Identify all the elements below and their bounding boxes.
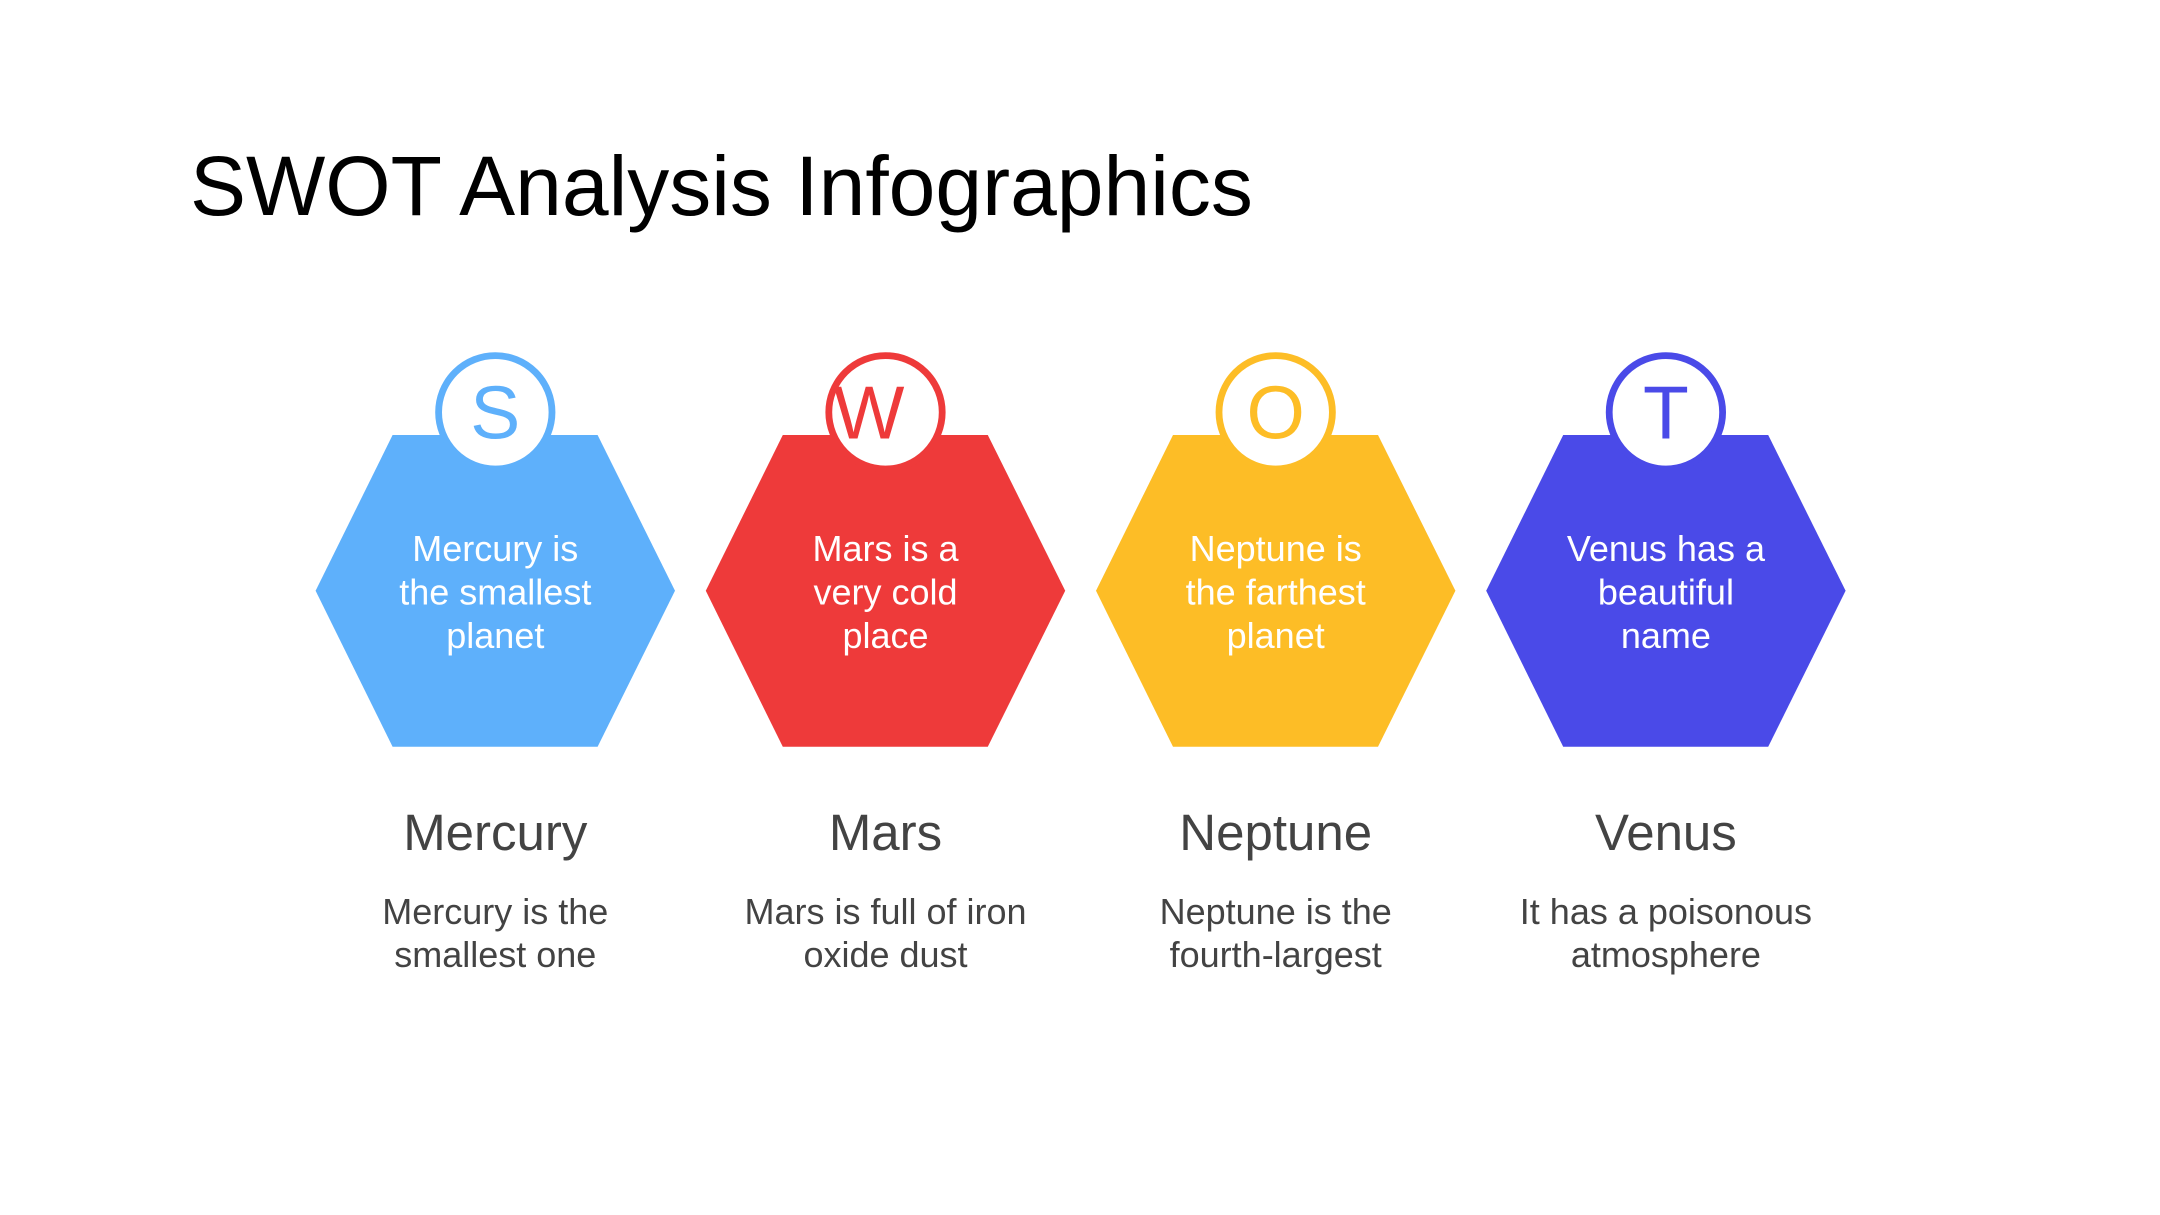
description: Mars: Mars is full of iron bbox=[744, 891, 1027, 932]
icon: circle O bbox=[1219, 356, 1332, 469]
hexagon text: Mercury: planet bbox=[446, 615, 544, 656]
hexagon: blue bbox=[316, 435, 675, 747]
hexagon: red bbox=[706, 435, 1065, 747]
panel: Venus threat bbox=[1486, 356, 1846, 975]
letter W: W bbox=[834, 370, 905, 454]
description: Neptune: fourth-largest bbox=[1170, 934, 1382, 975]
title: SWOT Analysis Infographics bbox=[190, 139, 1253, 233]
letter O: O bbox=[1247, 370, 1305, 454]
hexagon: yellow bbox=[1096, 435, 1455, 747]
icon: circle S bbox=[439, 356, 552, 469]
panel: Mars weakness bbox=[706, 356, 1065, 975]
panel: Mercury strength bbox=[316, 356, 675, 975]
icon: circle T bbox=[1609, 356, 1723, 469]
icon: circle W bbox=[829, 356, 942, 469]
hexagon text: Venus: Venus has a bbox=[1567, 528, 1766, 569]
description: Neptune: Neptune is the bbox=[1160, 891, 1392, 932]
letter S: S bbox=[470, 370, 520, 454]
letter T: T bbox=[1643, 370, 1689, 454]
panel: Neptune opportunity bbox=[1096, 356, 1455, 975]
hexagon text: Venus: name bbox=[1621, 615, 1711, 656]
description: Mercury: Mercury is the bbox=[382, 891, 608, 932]
hexagon: indigo bbox=[1486, 435, 1846, 747]
description: Venus: It has a poisonous bbox=[1520, 891, 1812, 932]
description: Mercury: smallest one bbox=[394, 934, 596, 975]
hexagon text: Mars: very cold bbox=[813, 572, 958, 612]
hexagon text: Mercury: Mercury is bbox=[412, 528, 578, 569]
hexagon text: Mars: Mars is a bbox=[812, 528, 959, 569]
description: Mars: oxide dust bbox=[803, 934, 968, 975]
heading: Venus: Venus bbox=[1595, 804, 1737, 861]
hexagon text: Neptune: Neptune is bbox=[1190, 528, 1362, 569]
heading: Mercury: Mercury bbox=[403, 804, 588, 861]
heading: Neptune: Neptune bbox=[1179, 804, 1372, 861]
hexagon text: Venus: beautiful bbox=[1598, 572, 1734, 612]
hexagon text: Mars: place bbox=[842, 615, 929, 656]
hexagon text: Neptune: planet bbox=[1227, 615, 1325, 656]
heading: Mars: Mars bbox=[829, 804, 942, 861]
hexagon text: Neptune: the farthest bbox=[1186, 572, 1366, 612]
hexagon text: Mercury: the smallest bbox=[399, 572, 591, 612]
description: Venus: atmosphere bbox=[1571, 934, 1761, 975]
